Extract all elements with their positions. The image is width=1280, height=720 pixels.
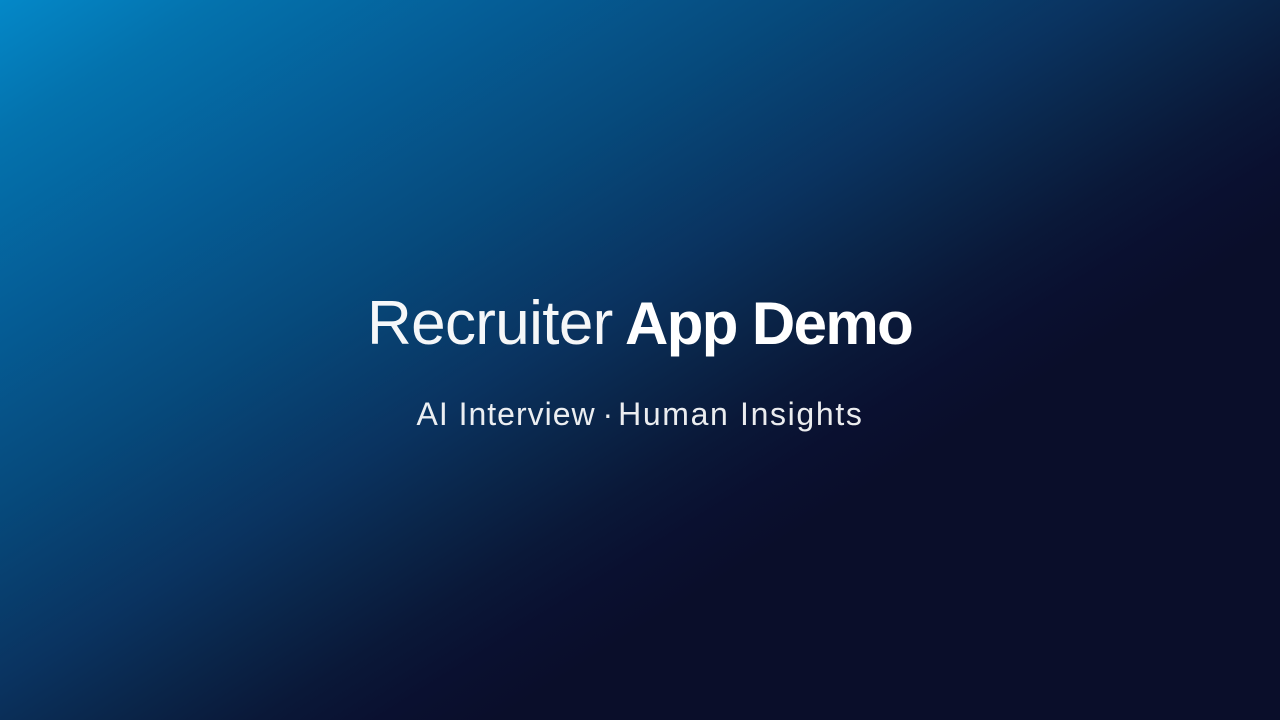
title	[367, 289, 912, 358]
title: App Demo	[625, 290, 912, 357]
subtitle: AI Interview · Human Insights	[416, 396, 864, 432]
title: Recruiter	[367, 289, 613, 358]
